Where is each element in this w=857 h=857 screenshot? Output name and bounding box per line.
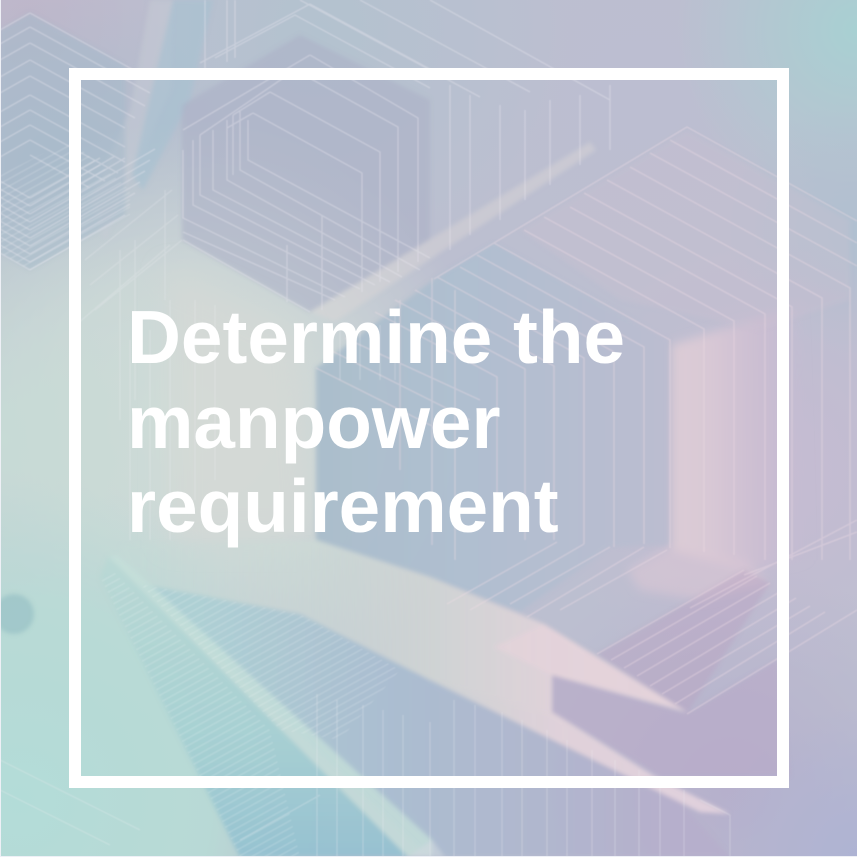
white square frame: [69, 68, 789, 788]
vertical beams at top: [124, 21, 164, 169]
pink vertical panel: [670, 325, 769, 564]
hexagon outline lines: [0, 0, 610, 312]
diagonal ray: [143, 584, 432, 856]
title: Determine the: [127, 295, 625, 379]
dark hexagon faces: [182, 35, 430, 312]
upper diagonal beam: [310, 142, 596, 322]
light ground under upper hexagons: [170, 270, 316, 540]
long light band: [286, 551, 727, 815]
title: requirement: [127, 464, 559, 548]
lower faces: [100, 556, 408, 857]
title: [127, 295, 625, 548]
circular mark at left: [0, 594, 34, 634]
title: manpower: [127, 380, 501, 464]
